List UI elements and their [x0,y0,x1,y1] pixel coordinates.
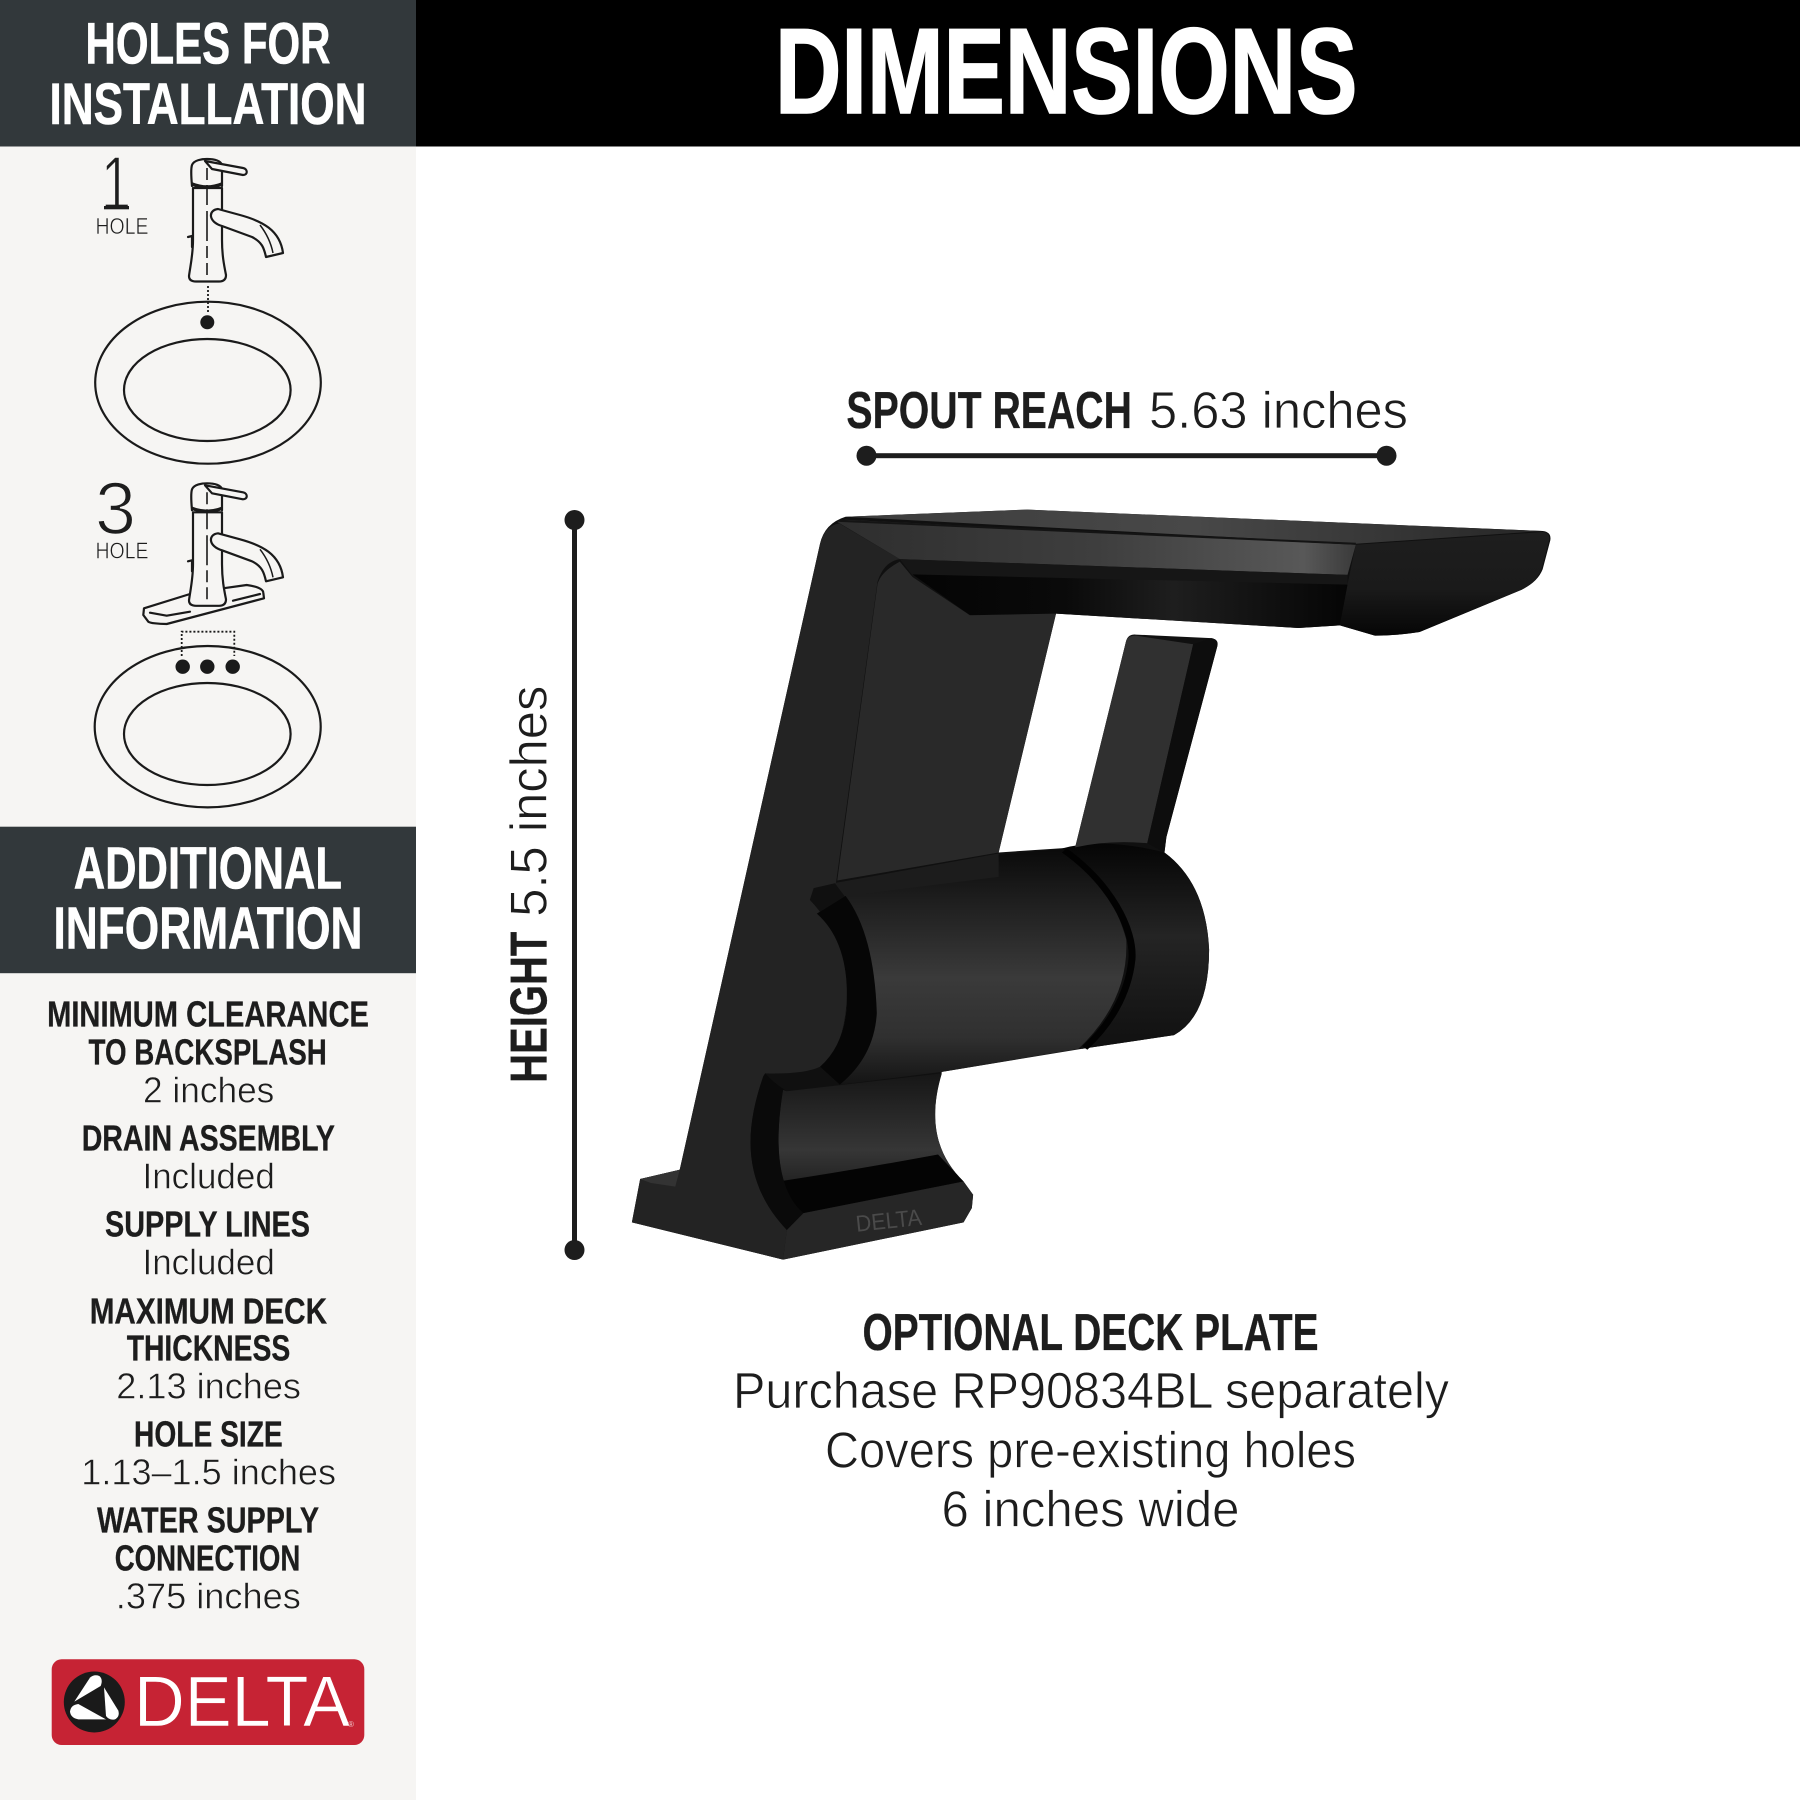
logo: delta: DELTA [134,1663,351,1742]
header: holes for installation: INSTALLATION [50,72,366,137]
text: minimum clearance: 2 inches [143,1069,274,1110]
text: hole size: HOLE SIZE [134,1414,283,1455]
label: spout reach: 5.63 inches [1149,382,1408,440]
icon: single hole faucet [188,159,283,282]
label: height: 5.5 inches [501,686,559,917]
label: 1 hole [96,141,148,239]
illustration: black bathroom faucet [632,510,1550,1260]
label: height [501,686,559,1083]
icon: three hole basin [95,632,321,807]
arrow: height measure [564,510,584,1260]
title: dimensions [416,0,1800,146]
label: 3 hole [95,467,148,563]
text: drain assembly [82,1118,335,1196]
text: optional deck plate: Covers pre-existing holes [825,1422,1356,1479]
text: minimum clearance: MINIMUM CLEARANCE [47,994,369,1035]
text: maximum deck thickness: MAXIMUM DECK [90,1290,327,1331]
header: additional information: INFORMATION [54,895,362,961]
label: spout reach [846,382,1408,440]
text: optional deck plate [733,1304,1449,1538]
logo: delta [52,1659,364,1745]
text: minimum clearance: TO BACKSPLASH [88,1031,327,1072]
illustration: black bathroom faucet: DELTA [855,1204,923,1237]
arrow: spout reach measure [856,446,1396,466]
label: spout reach: SPOUT REACH [846,382,1132,440]
text: water supply connection: WATER SUPPLY [97,1500,319,1541]
title: dimensions: DIMENSIONS [775,3,1357,139]
header: additional information: ADDITIONAL [74,835,342,901]
text: drain assembly: Included [142,1155,275,1196]
text: optional deck plate: OPTIONAL DECK PLATE [862,1304,1318,1362]
panel: sidebar [0,0,416,1800]
text: optional deck plate: Purchase RP90834BL separately [733,1362,1449,1419]
header: additional information [0,827,416,973]
label: 1 hole: HOLE [96,213,148,239]
text: water supply connection: .375 inches [116,1575,301,1616]
text: supply lines: Included [142,1241,275,1282]
logo: delta: ® [348,1720,354,1729]
icon: three hole faucet with deck plate [143,483,283,624]
text: water supply connection: CONNECTION [115,1538,300,1579]
text: hole size: 1.13–1.5 inches [81,1451,336,1492]
text: minimum clearance [47,994,369,1110]
text: water supply connection [97,1500,319,1616]
text: hole size [81,1414,336,1492]
text: maximum deck thickness: 2.13 inches [116,1365,301,1406]
text: drain assembly: DRAIN ASSEMBLY [82,1118,335,1159]
header: holes for installation [0,0,416,146]
label: 3 hole: 3 [95,467,136,550]
icon: single hole basin [95,286,321,464]
text: supply lines: SUPPLY LINES [105,1204,310,1245]
text: maximum deck thickness [90,1290,327,1406]
text: supply lines [105,1204,310,1282]
header: holes for installation: HOLES FOR [86,11,330,76]
label: height: HEIGHT [501,932,559,1083]
text: optional deck plate: 6 inches wide [942,1481,1240,1538]
label: 3 hole: HOLE [96,537,148,563]
text: maximum deck thickness: THICKNESS [127,1328,290,1369]
label: 1 hole: 1 [101,141,131,226]
